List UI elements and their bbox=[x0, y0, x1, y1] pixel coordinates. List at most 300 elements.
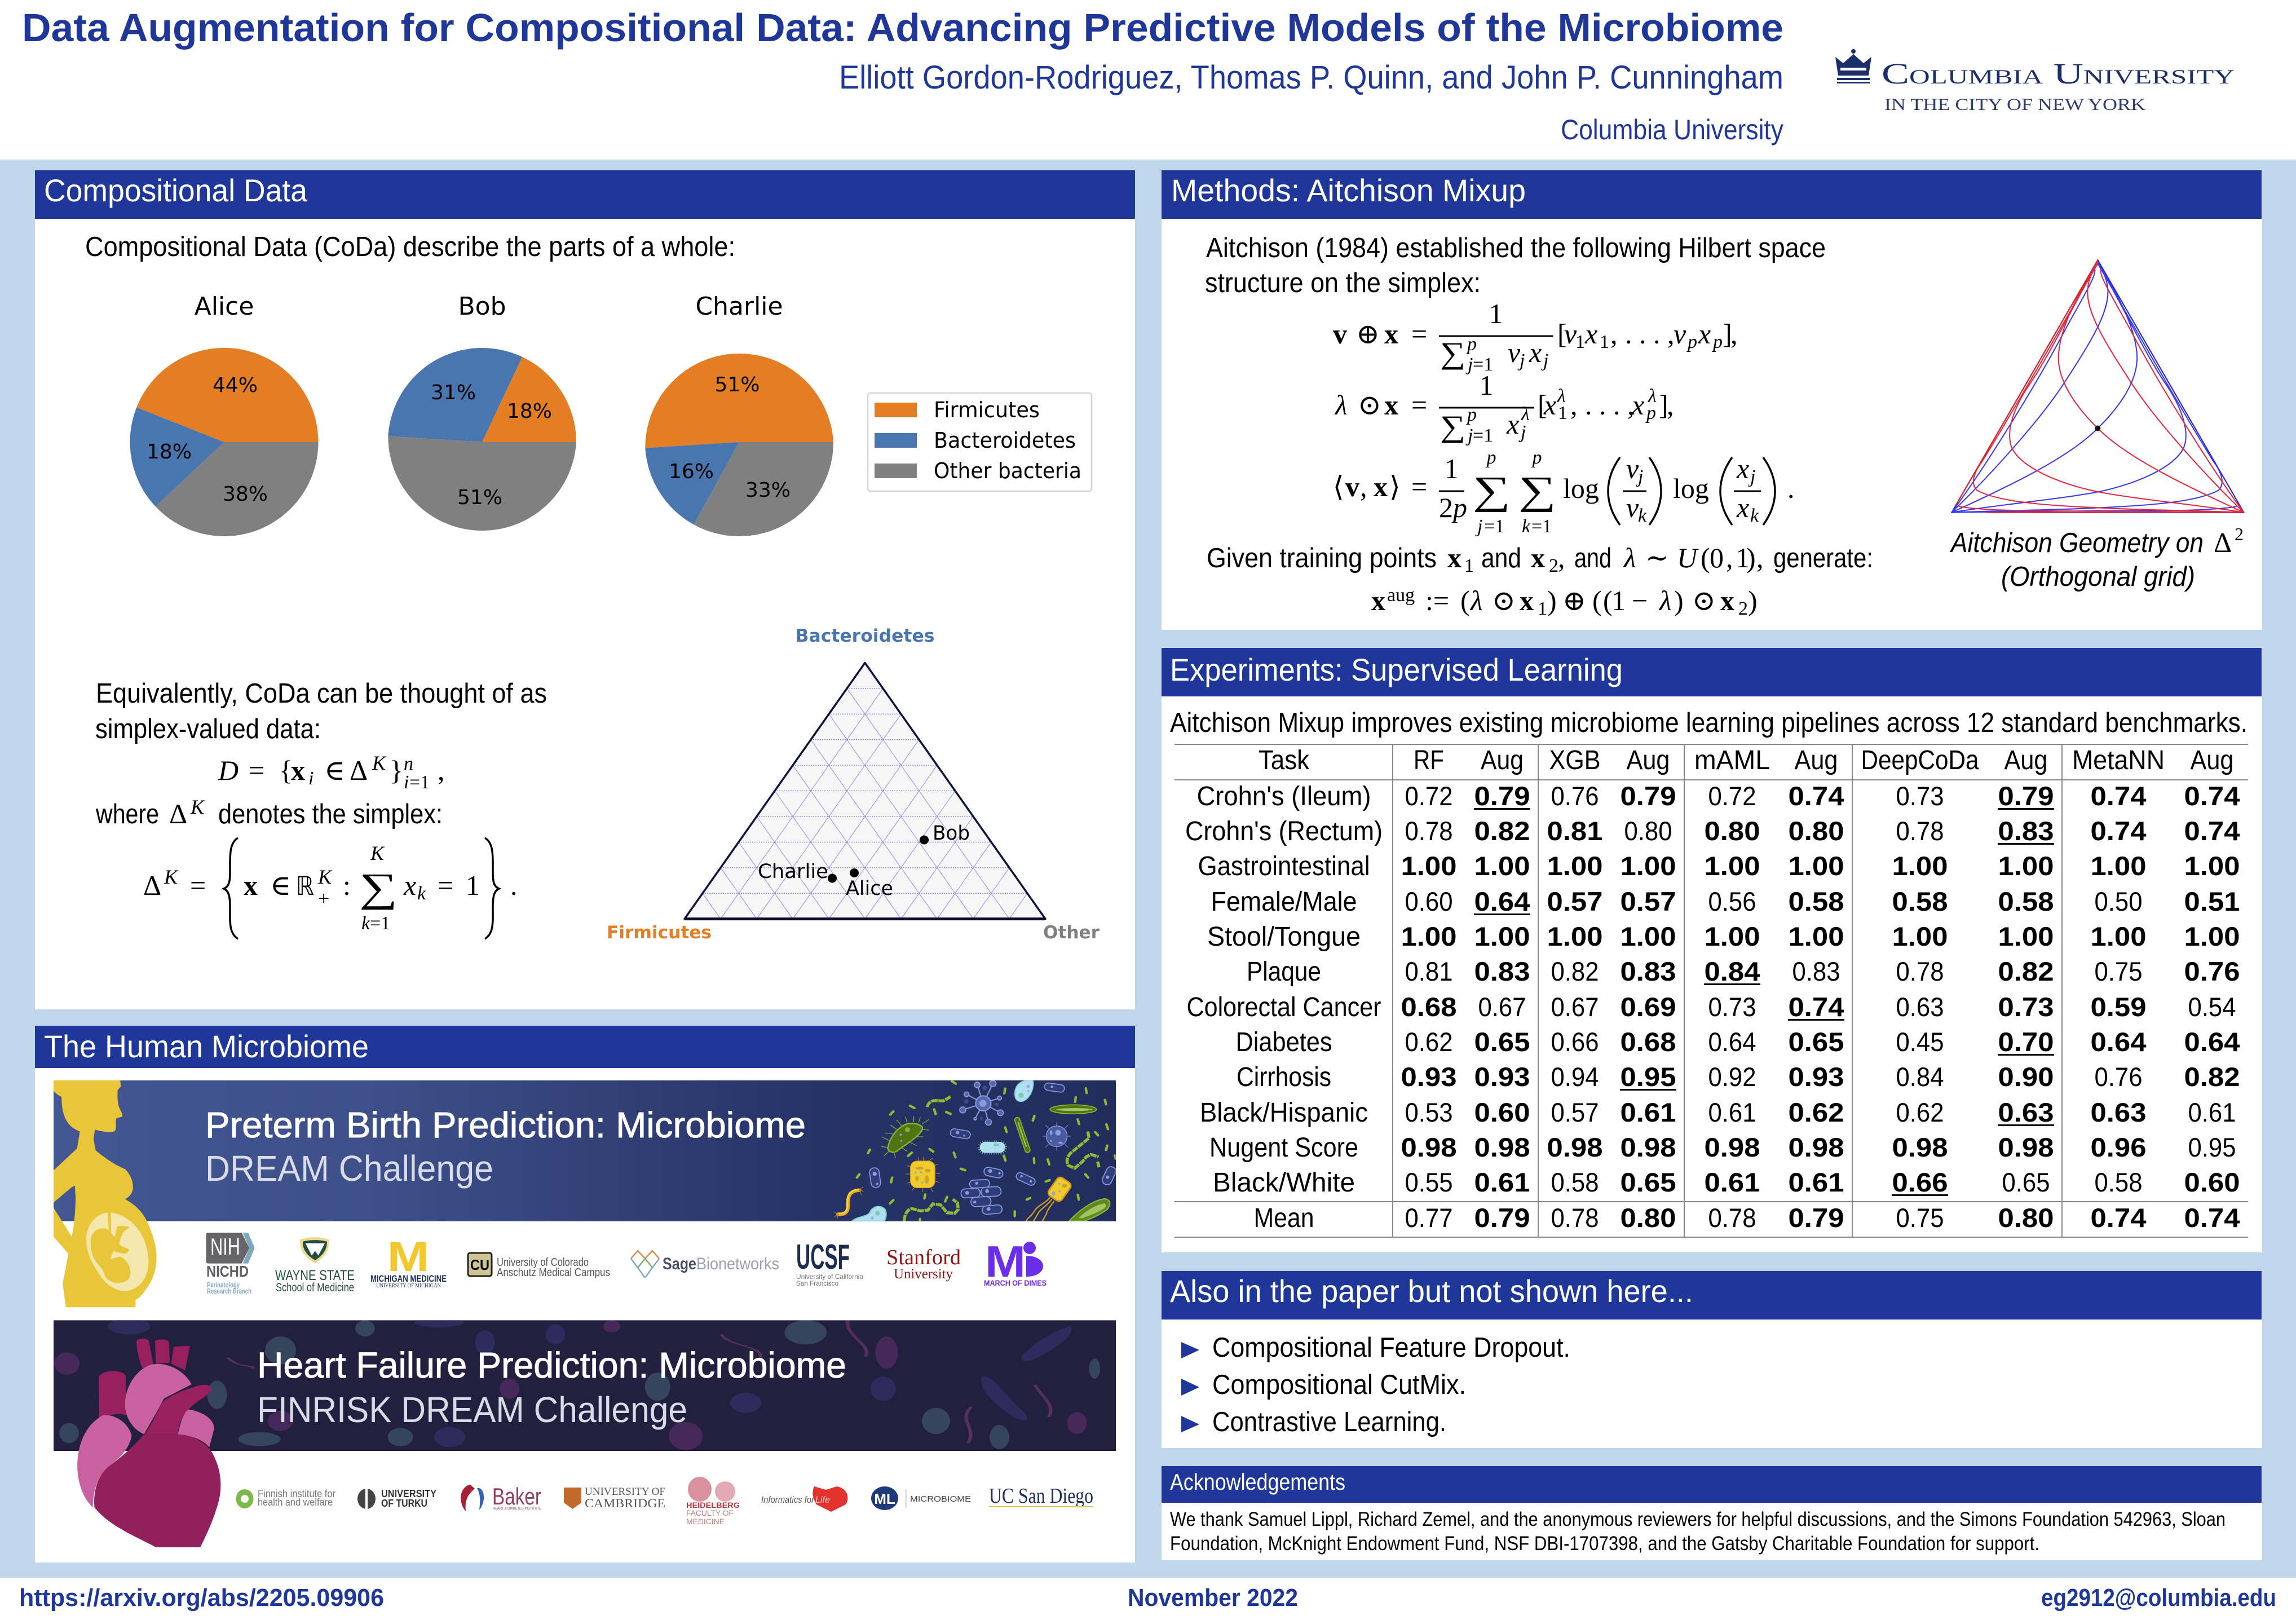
logo: University of Turku bbox=[357, 1488, 436, 1511]
chart caption: Aitchison Geometry on bbox=[1949, 528, 2204, 558]
row: Stool/Tongue: 1.00 bbox=[2184, 921, 2240, 951]
row: Plaque: 0.83 bbox=[1474, 956, 1530, 986]
formula: augmentation: ⊙ bbox=[1692, 585, 1716, 616]
pie chart: Alice: 38% bbox=[223, 483, 268, 506]
row: Colorectal Cancer: 0.67 bbox=[1478, 992, 1526, 1022]
logo: University of Cambridge: CAMBRIDGE bbox=[585, 1496, 665, 1510]
formula: inner product: k bbox=[1522, 516, 1531, 537]
row: Diabetes: 0.64 bbox=[2184, 1027, 2240, 1057]
row: Black/White: 0.65 bbox=[2002, 1167, 2050, 1197]
footer link: https://arxiv.org/abs/2205.09906 bbox=[19, 1584, 384, 1612]
formula: simplex definition: = bbox=[190, 870, 206, 901]
chart caption: Δ bbox=[2214, 527, 2232, 558]
formula: perturbation: 1 bbox=[1600, 332, 1609, 352]
row: Crohn's (Rectum): 0.80 bbox=[1789, 816, 1844, 846]
yellow spiky microbe bbox=[906, 1157, 940, 1192]
formula: powering: =1 bbox=[1473, 425, 1493, 446]
banner heading: Preterm Birth Prediction: Microbiome bbox=[205, 1105, 806, 1145]
legend: Other bacteria bbox=[934, 458, 1081, 483]
formula: augmentation: := bbox=[1425, 585, 1449, 616]
logo: March of Dimes: M bbox=[985, 1237, 1026, 1286]
row: Diabetes: 0.64 bbox=[1708, 1027, 1756, 1057]
formula: dataset definition: K bbox=[372, 752, 387, 774]
row: Nugent Score: 0.98 bbox=[1789, 1132, 1844, 1162]
formula: powering: j bbox=[1518, 422, 1526, 443]
logo: Sage Bionetworks: Sage bbox=[663, 1255, 696, 1273]
virus bbox=[960, 1080, 1004, 1125]
formula: perturbation: x bbox=[1584, 318, 1597, 350]
formula: simplex definition: Δ bbox=[143, 870, 161, 901]
logo: UC San Diego: UC San Diego bbox=[989, 1484, 1093, 1508]
row: Cirrhosis: 0.93 bbox=[1789, 1062, 1844, 1092]
formula: dataset definition: =1 bbox=[409, 772, 430, 793]
row: Female/Male bbox=[1211, 886, 2240, 917]
formula: inner product: k bbox=[1750, 505, 1759, 526]
row: Stool/Tongue: 1.00 bbox=[2091, 921, 2146, 951]
panel: methods bbox=[1162, 170, 2262, 630]
row: Crohn's (Ileum): 0.79 bbox=[1998, 781, 2054, 811]
footer date: November 2022 bbox=[1128, 1584, 1298, 1612]
yellow flagellate bbox=[1026, 1176, 1072, 1221]
cyan capsule bbox=[1015, 1080, 1034, 1101]
row: Female/Male: 0.56 bbox=[1708, 886, 1756, 916]
ternary plot: Firmicutes bbox=[607, 923, 712, 943]
row: Nugent Score: 0.98 bbox=[1892, 1132, 1948, 1162]
table header: Aug bbox=[1794, 745, 1838, 775]
logo: Finnish institute: Finnish institute for bbox=[258, 1488, 335, 1499]
row: Female/Male: 0.64 bbox=[1474, 886, 1530, 916]
row: Gastrointestinal: Gastrointestinal bbox=[1198, 851, 1370, 881]
row: Gastrointestinal: 1.00 bbox=[1474, 851, 1530, 881]
logos: heart failure challenge sponsors bbox=[236, 1477, 1093, 1526]
formula: simplex definition: k bbox=[417, 883, 426, 904]
legend: Bacteroidetes bbox=[934, 428, 1076, 453]
formula: augmentation: λ bbox=[1469, 585, 1483, 616]
dark spiky virus bbox=[1043, 1122, 1071, 1151]
formula: perturbation: p bbox=[1686, 332, 1697, 352]
row: Stool/Tongue: 1.00 bbox=[1401, 921, 1457, 951]
formula: powering: x bbox=[1543, 389, 1556, 421]
formula: perturbation: ∑ bbox=[1440, 336, 1465, 370]
panel: methods: structure on the simplex: bbox=[1205, 268, 1481, 298]
formula: dataset definition: , bbox=[438, 754, 444, 786]
row: Gastrointestinal: 1.00 bbox=[1789, 851, 1844, 881]
formula: augmentation: ⊙ bbox=[1492, 585, 1516, 616]
formula: inner product: p bbox=[1451, 492, 1467, 523]
formula: powering: ] bbox=[1659, 389, 1668, 421]
data points bbox=[920, 836, 929, 845]
footer band bbox=[0, 1578, 2296, 1624]
row: Colorectal Cancer: 0.63 bbox=[1896, 992, 1944, 1022]
intro text: Aitchison (1984) established the following Hilbert space bbox=[1206, 233, 1826, 263]
row: Black/White: 0.55 bbox=[1405, 1167, 1452, 1197]
row: Cirrhosis: 0.93 bbox=[1474, 1062, 1530, 1092]
formula: augmentation: ) bbox=[1674, 585, 1684, 616]
formula: simplex definition: ℝ bbox=[296, 871, 314, 901]
pie chart: Bob: 31% bbox=[431, 381, 476, 404]
row: Colorectal Cancer: 0.73 bbox=[1708, 992, 1756, 1022]
row: Black/Hispanic: 0.53 bbox=[1405, 1097, 1452, 1127]
row: Cirrhosis: 0.82 bbox=[2184, 1062, 2240, 1092]
row: Mean: 0.79 bbox=[1474, 1203, 1530, 1233]
row: Nugent Score: 0.98 bbox=[1474, 1132, 1530, 1162]
formula: powering: j bbox=[1465, 425, 1473, 446]
given text: Given training points bbox=[1207, 543, 1437, 573]
pie chart: Charlie: 16% bbox=[669, 460, 714, 483]
formula: dataset definition: i bbox=[404, 772, 409, 793]
formula: inner product: x bbox=[1374, 471, 1388, 502]
formula: inner product: ∑ bbox=[1473, 469, 1511, 513]
formula: dataset definition: D bbox=[218, 754, 239, 786]
row: Crohn's (Rectum): Crohn's (Rectum) bbox=[1185, 817, 1383, 846]
formula: perturbation: v bbox=[1333, 318, 1347, 350]
formula: simplex definition: K bbox=[370, 842, 385, 864]
logo: Informatics for Life bbox=[761, 1486, 847, 1512]
ternary plot: Charlie bbox=[758, 860, 828, 883]
logo: Stanford: University bbox=[894, 1266, 953, 1282]
row: Black/Hispanic: Black/Hispanic bbox=[1200, 1098, 1368, 1128]
row: Female/Male: 0.50 bbox=[2094, 886, 2143, 916]
row: Mean: 0.74 bbox=[2091, 1203, 2146, 1233]
row: Black/White: Black/White bbox=[1213, 1168, 1355, 1198]
row: Nugent Score: 0.98 bbox=[1621, 1132, 1676, 1162]
acknowledgements text bbox=[1170, 1508, 2226, 1555]
row: Nugent Score: 0.98 bbox=[1704, 1132, 1760, 1162]
formula: augmentation: 1 bbox=[1611, 585, 1626, 616]
panel: acknowledgements bbox=[1162, 1466, 2262, 1560]
formula: perturbation: v bbox=[1508, 337, 1521, 368]
formula: perturbation: ⊕ bbox=[1356, 318, 1380, 350]
row: Diabetes: 0.66 bbox=[1551, 1027, 1599, 1057]
formula: powering: 1 bbox=[1480, 369, 1493, 401]
formula: dataset definition: x bbox=[291, 754, 305, 786]
formula: inner product: ⟩ bbox=[1389, 471, 1401, 502]
row: Crohn's (Ileum): 0.79 bbox=[1621, 781, 1676, 811]
legend bbox=[868, 393, 1092, 491]
given text: ∼ bbox=[1645, 542, 1669, 573]
row: Mean: 0.78 bbox=[1708, 1203, 1756, 1233]
formula: inner product: v bbox=[1626, 453, 1639, 484]
logo: Baker: HEART & DIABETES INSTITUTE bbox=[493, 1507, 541, 1511]
table header: Task bbox=[1259, 745, 1310, 775]
row: Stool/Tongue: 1.00 bbox=[1998, 921, 2054, 951]
outlined capsules bbox=[869, 1083, 1118, 1215]
row: Black/Hispanic: 0.61 bbox=[1621, 1097, 1676, 1127]
formula: inner product: p bbox=[1531, 447, 1542, 468]
row: Plaque: 0.75 bbox=[2094, 956, 2143, 986]
row: Crohn's (Rectum): 0.74 bbox=[2091, 816, 2146, 846]
logo: University of Turku: UNIVERSITY bbox=[381, 1488, 436, 1499]
formula: dataset definition: Δ bbox=[350, 754, 368, 786]
formula: perturbation: 1 bbox=[1575, 332, 1585, 352]
row: Gastrointestinal: 1.00 bbox=[1401, 851, 1457, 881]
formula: perturbation: =1 bbox=[1473, 354, 1493, 375]
pie chart: Alice: 44% bbox=[213, 374, 258, 397]
formula: inner product: = bbox=[1411, 471, 1427, 502]
row: Diabetes: 0.65 bbox=[1474, 1027, 1530, 1057]
heading: experiments: Experiments: Supervised Learning bbox=[1170, 652, 1623, 687]
ternary plot bbox=[607, 626, 1100, 943]
formula: inner product: j bbox=[1636, 466, 1643, 487]
logo: Stanford: Stanford bbox=[886, 1246, 961, 1269]
row: Black/Hispanic bbox=[1200, 1097, 2236, 1128]
formula: inner product: log bbox=[1563, 473, 1599, 504]
row: Black/White: 0.61 bbox=[1704, 1167, 1760, 1197]
heading: compositional data: Compositional Data bbox=[44, 173, 308, 208]
formula: powering: , bbox=[1570, 389, 1578, 421]
row: Mean: 0.80 bbox=[1621, 1203, 1676, 1233]
row: Black/Hispanic: 0.61 bbox=[1708, 1097, 1756, 1127]
formula: augmentation: ) bbox=[1748, 585, 1758, 616]
row: Plaque: 0.84 bbox=[1704, 956, 1760, 986]
row: Nugent Score: 0.98 bbox=[1998, 1132, 2054, 1162]
row: Mean: 0.74 bbox=[2184, 1203, 2240, 1233]
intro text: Compositional Data (CoDa) describe the parts of a whole: bbox=[85, 232, 735, 262]
row: Stool/Tongue: 1.00 bbox=[1789, 921, 1844, 951]
row: Plaque: 0.83 bbox=[1621, 956, 1676, 986]
microbes pattern bbox=[54, 1317, 1100, 1450]
logo: Wayne State: WAYNE STATE bbox=[275, 1268, 355, 1283]
panel: also in the paper bbox=[1162, 1271, 2262, 1448]
row: Cirrhosis: 0.90 bbox=[1998, 1062, 2054, 1092]
row: Cirrhosis: 0.95 bbox=[1621, 1062, 1676, 1092]
bottom right rod bbox=[1069, 1199, 1110, 1221]
formula: powering: λ bbox=[1648, 386, 1657, 407]
formula: inner product: k bbox=[1638, 505, 1647, 526]
row: Diabetes: 0.68 bbox=[1621, 1027, 1676, 1057]
logo: University of Cambridge bbox=[564, 1486, 665, 1510]
formula: simplex definition: K bbox=[164, 866, 179, 888]
logo: University of Turku: OF TURKU bbox=[381, 1498, 427, 1509]
logo: Sage Bionetworks bbox=[631, 1251, 779, 1278]
row: Stool/Tongue: 1.00 bbox=[1892, 921, 1948, 951]
logo: University of Colorado: CU bbox=[470, 1256, 489, 1273]
row: Crohn's (Rectum): 0.74 bbox=[2184, 816, 2240, 846]
formula: augmentation: aug bbox=[1387, 585, 1415, 606]
table header: Aug bbox=[1481, 745, 1524, 775]
given text: ( bbox=[1701, 542, 1710, 573]
row: Gastrointestinal: 1.00 bbox=[1998, 851, 2054, 881]
row: Black/Hispanic: 0.63 bbox=[1998, 1097, 2054, 1127]
logo: Finnish institute: health and welfare bbox=[258, 1497, 333, 1508]
row: Colorectal Cancer: 0.54 bbox=[2188, 992, 2236, 1022]
pie chart: Charlie: 51% bbox=[714, 373, 760, 396]
formula: simplex definition: k bbox=[361, 913, 370, 934]
formula: simplex definition: 1 bbox=[466, 870, 480, 901]
green rods bbox=[1017, 1105, 1097, 1150]
formula: augmentation: ) bbox=[1547, 585, 1557, 616]
formula: perturbation: j bbox=[1465, 354, 1473, 375]
formula: inner product: v bbox=[1626, 492, 1639, 523]
row: Nugent Score: 0.96 bbox=[2091, 1132, 2146, 1162]
logo: March of Dimes bbox=[984, 1237, 1047, 1287]
formula: simplex definition: = bbox=[438, 870, 453, 901]
formula: augmentation: x bbox=[1720, 585, 1734, 616]
row: Colorectal Cancer: 0.69 bbox=[1621, 992, 1676, 1022]
formula: augmentation: 1 bbox=[1538, 598, 1547, 619]
row: Mean: Mean bbox=[1254, 1203, 1314, 1233]
row: Black/Hispanic: 0.57 bbox=[1551, 1097, 1599, 1127]
formula: augmentation: x bbox=[1371, 585, 1385, 616]
logo: Stanford bbox=[886, 1246, 961, 1282]
row: Diabetes: 0.62 bbox=[1405, 1027, 1452, 1057]
formula: powering: [ bbox=[1538, 389, 1547, 421]
logo: ML microbiome: ML bbox=[874, 1490, 895, 1507]
row: Colorectal Cancer: 0.67 bbox=[1551, 992, 1599, 1022]
given text: 0 bbox=[1710, 542, 1724, 573]
row: Female/Male: 0.58 bbox=[1892, 886, 1948, 916]
formula: dataset definition: n bbox=[404, 753, 413, 774]
formula: simplex definition: =1 bbox=[370, 913, 390, 934]
spiky green microbe bbox=[881, 1116, 929, 1158]
row: Black/Hispanic: 0.63 bbox=[2091, 1097, 2146, 1127]
simplex text block: simplex-valued data: bbox=[95, 714, 321, 744]
logo: UCSF: University of California bbox=[796, 1273, 863, 1281]
results table bbox=[1175, 744, 2248, 1237]
formula: augmentation: x bbox=[1520, 585, 1534, 616]
formula: powering: x bbox=[1384, 389, 1398, 421]
formula: perturbation: 1 bbox=[1489, 298, 1503, 329]
cyan blob bbox=[852, 1207, 886, 1221]
row: Crohn's (Ileum): 0.76 bbox=[1551, 781, 1599, 811]
row: Mean: 0.80 bbox=[1998, 1203, 2054, 1233]
formula: powering: x bbox=[1506, 408, 1519, 440]
formula: inner product: p bbox=[1485, 447, 1496, 468]
ternary plot: Bob bbox=[933, 822, 970, 845]
formula: dataset definition: i bbox=[308, 768, 314, 789]
row: Crohn's (Ileum): 0.79 bbox=[1474, 781, 1530, 811]
banner: heart failure bbox=[54, 1317, 1116, 1451]
formula: powering: = bbox=[1411, 389, 1427, 421]
logo: Heidelberg: MEDICINE bbox=[686, 1517, 725, 1526]
microbes illustration bbox=[834, 1080, 1118, 1221]
formula: perturbation: [ bbox=[1557, 318, 1567, 350]
row: Nugent Score: Nugent Score bbox=[1209, 1133, 1358, 1163]
chart caption: 2 bbox=[2235, 524, 2244, 544]
row: Black/White bbox=[1213, 1167, 2240, 1198]
row: Nugent Score: 0.95 bbox=[2188, 1132, 2236, 1162]
pie chart: Alice: Alice bbox=[195, 292, 254, 321]
logo: Heidelberg bbox=[686, 1477, 740, 1526]
row: Diabetes bbox=[1236, 1027, 2240, 1057]
row: Gastrointestinal: 1.00 bbox=[1892, 851, 1948, 881]
pie chart: Bob: Bob bbox=[458, 292, 506, 321]
table header: RF bbox=[1414, 745, 1444, 775]
icon: heart bbox=[77, 1339, 220, 1547]
logo: University of Cambridge: UNIVERSITY OF bbox=[585, 1486, 665, 1498]
formula: inner product: =1 bbox=[1484, 516, 1504, 537]
row: Gastrointestinal bbox=[1198, 851, 2240, 881]
logo wordmark: Columbia University bbox=[1882, 58, 2235, 90]
row: Nugent Score bbox=[1209, 1132, 2236, 1163]
formula: simplex definition: x bbox=[244, 870, 258, 901]
logo subline: IN THE CITY OF NEW YORK bbox=[1884, 95, 2145, 114]
table header: Aug bbox=[2190, 745, 2234, 775]
formula: inner product: . bbox=[1787, 473, 1794, 504]
formula: perturbation: p bbox=[1712, 332, 1723, 352]
row: Diabetes: 0.64 bbox=[2091, 1027, 2146, 1057]
formula: inner product bbox=[1333, 447, 1794, 537]
formula: powering: p bbox=[1645, 403, 1656, 423]
row: Black/White: 0.60 bbox=[2184, 1167, 2240, 1197]
bullet list: Compositional Feature Dropout. bbox=[1212, 1332, 1570, 1363]
row: Colorectal Cancer: 0.74 bbox=[1789, 992, 1844, 1022]
banner subheading: DREAM Challenge bbox=[205, 1148, 493, 1189]
row: Crohn's (Ileum): 0.72 bbox=[1708, 781, 1756, 811]
formula: powering: p bbox=[1466, 404, 1477, 425]
row: Plaque: 0.82 bbox=[1551, 956, 1599, 986]
logos: preterm challenge sponsors bbox=[206, 1233, 1047, 1295]
row: Black/White: 0.61 bbox=[1474, 1167, 1530, 1197]
formula: augmentation: ( bbox=[1592, 585, 1602, 616]
logo: Wayne State: School of Medicine bbox=[276, 1281, 354, 1294]
formula: perturbation: j bbox=[1541, 350, 1548, 371]
logo: NIH NICHD: NICHD bbox=[206, 1263, 249, 1280]
formula: powering: x bbox=[1631, 389, 1644, 421]
formula: perturbation: j bbox=[1517, 350, 1525, 371]
logo: Baker: Baker bbox=[492, 1483, 541, 1510]
logo: Finnish institute bbox=[236, 1488, 335, 1508]
pie chart: Alice bbox=[130, 292, 318, 536]
table header: XGB bbox=[1549, 745, 1600, 775]
simplex text block: K bbox=[190, 796, 205, 818]
row: Gastrointestinal: 1.00 bbox=[1621, 851, 1676, 881]
logo: UCSF: UCSF bbox=[796, 1238, 850, 1277]
chart: Aitchison geometry simplex bbox=[1951, 260, 2244, 513]
formula: inner product: 1 bbox=[1445, 453, 1458, 484]
chart caption bbox=[1949, 524, 2244, 592]
row: Crohn's (Rectum): 0.83 bbox=[1998, 816, 2054, 846]
formula: perturbation: x bbox=[1698, 318, 1711, 350]
formula: augmentation: − bbox=[1632, 585, 1648, 616]
row: Stool/Tongue: 1.00 bbox=[1547, 921, 1602, 951]
given text: , bbox=[1558, 542, 1565, 573]
logo: University of Colorado: Anschutz Medical Campus bbox=[497, 1266, 610, 1279]
given text bbox=[1207, 542, 1873, 576]
row: Crohn's (Rectum) bbox=[1185, 816, 2240, 846]
row: Black/White: 0.61 bbox=[1789, 1167, 1844, 1197]
formula: perturbation: x bbox=[1529, 337, 1542, 368]
simplex text block bbox=[95, 678, 547, 939]
row: Crohn's (Rectum): 0.78 bbox=[1896, 816, 1944, 846]
table header: mAML bbox=[1694, 745, 1770, 775]
row: Plaque: 0.76 bbox=[2184, 956, 2240, 986]
formula: inner product: , bbox=[1360, 471, 1367, 502]
row: Female/Male: 0.58 bbox=[1998, 886, 2054, 916]
row: Crohn's (Rectum): 0.80 bbox=[1624, 816, 1672, 846]
formula: perturbation: v bbox=[1564, 318, 1577, 350]
row: Black/Hispanic: 0.60 bbox=[1474, 1097, 1530, 1127]
simplex text block: denotes the simplex: bbox=[218, 799, 443, 829]
row: Plaque: 0.82 bbox=[1998, 956, 2054, 986]
panel: compositional data bbox=[35, 170, 1135, 1009]
logo: NIH NICHD: Research Branch bbox=[207, 1287, 251, 1295]
heading: also in the paper: Also in the paper but not shown here... bbox=[1170, 1273, 1693, 1309]
row: Colorectal Cancer bbox=[1186, 992, 2236, 1022]
formula: inner product: j bbox=[1748, 466, 1755, 487]
logo: Michigan Medicine: MICHIGAN MEDICINE bbox=[370, 1273, 447, 1284]
row: Colorectal Cancer: Colorectal Cancer bbox=[1186, 992, 1381, 1022]
formula: perturbation: ] bbox=[1723, 318, 1732, 350]
acknowledgements text: Foundation, McKnight Endowment Fund, NSF DBI-1707398, and the Gatsby Charitable Foundation for support. bbox=[1170, 1533, 2039, 1555]
pie chart: Alice: 18% bbox=[147, 440, 192, 464]
formula: perturbation: , bbox=[1610, 318, 1617, 350]
bullet list: Contrastive Learning. bbox=[1212, 1407, 1446, 1437]
yellow squiggle bbox=[834, 1187, 864, 1220]
given text: U bbox=[1677, 542, 1699, 573]
formula: powering: ∑ bbox=[1440, 409, 1465, 443]
row: Mean: 0.78 bbox=[1551, 1203, 1599, 1233]
